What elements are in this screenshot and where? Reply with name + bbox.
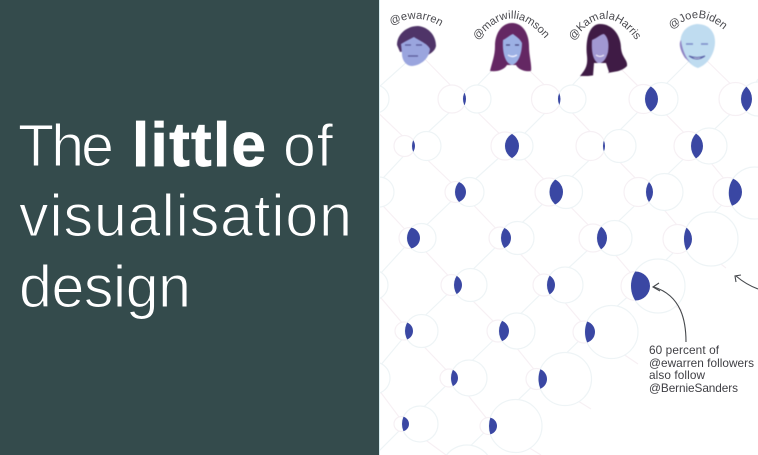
title: of <box>283 113 334 179</box>
row 1 overlap nodes <box>438 82 758 116</box>
row 7 overlap nodes <box>440 352 592 406</box>
arrow: annotation to ewarren overlap <box>653 283 686 342</box>
callout text: @ewarren followers <box>649 356 754 370</box>
row 3 overlap nodes <box>445 167 758 219</box>
title: The <box>18 113 114 179</box>
label: @marwilliamson: @marwilliamson <box>474 10 548 40</box>
portrait: KamalaHarris <box>580 24 627 77</box>
title: design <box>19 254 191 320</box>
portrait: ewarren <box>397 26 436 66</box>
title: little <box>132 111 266 180</box>
row 2 overlap nodes <box>394 128 727 164</box>
row 5 overlap nodes <box>441 259 685 313</box>
arrow: partial at right edge <box>735 275 758 289</box>
callout text <box>649 343 754 395</box>
label: @JoeBiden: @JoeBiden <box>670 10 726 30</box>
edge circles <box>358 85 488 455</box>
callout text: also follow <box>649 368 705 382</box>
callout text: 60 percent of <box>649 343 720 357</box>
label: @KamalaHarris: @KamalaHarris <box>570 10 640 40</box>
left title panel <box>0 0 380 455</box>
row 6 overlap nodes <box>395 306 638 358</box>
row 8 overlap nodes <box>394 400 542 452</box>
label: @ewarren <box>390 12 442 26</box>
title: visualisation <box>19 183 352 249</box>
network links <box>370 52 758 455</box>
callout text: @BernieSanders <box>649 381 738 395</box>
row 4 overlap nodes <box>399 212 738 266</box>
label: @ewarren: @ewarren <box>390 12 442 26</box>
portrait: JoeBiden <box>680 24 715 68</box>
title <box>18 111 352 320</box>
portrait: marwilliamson <box>490 23 531 71</box>
